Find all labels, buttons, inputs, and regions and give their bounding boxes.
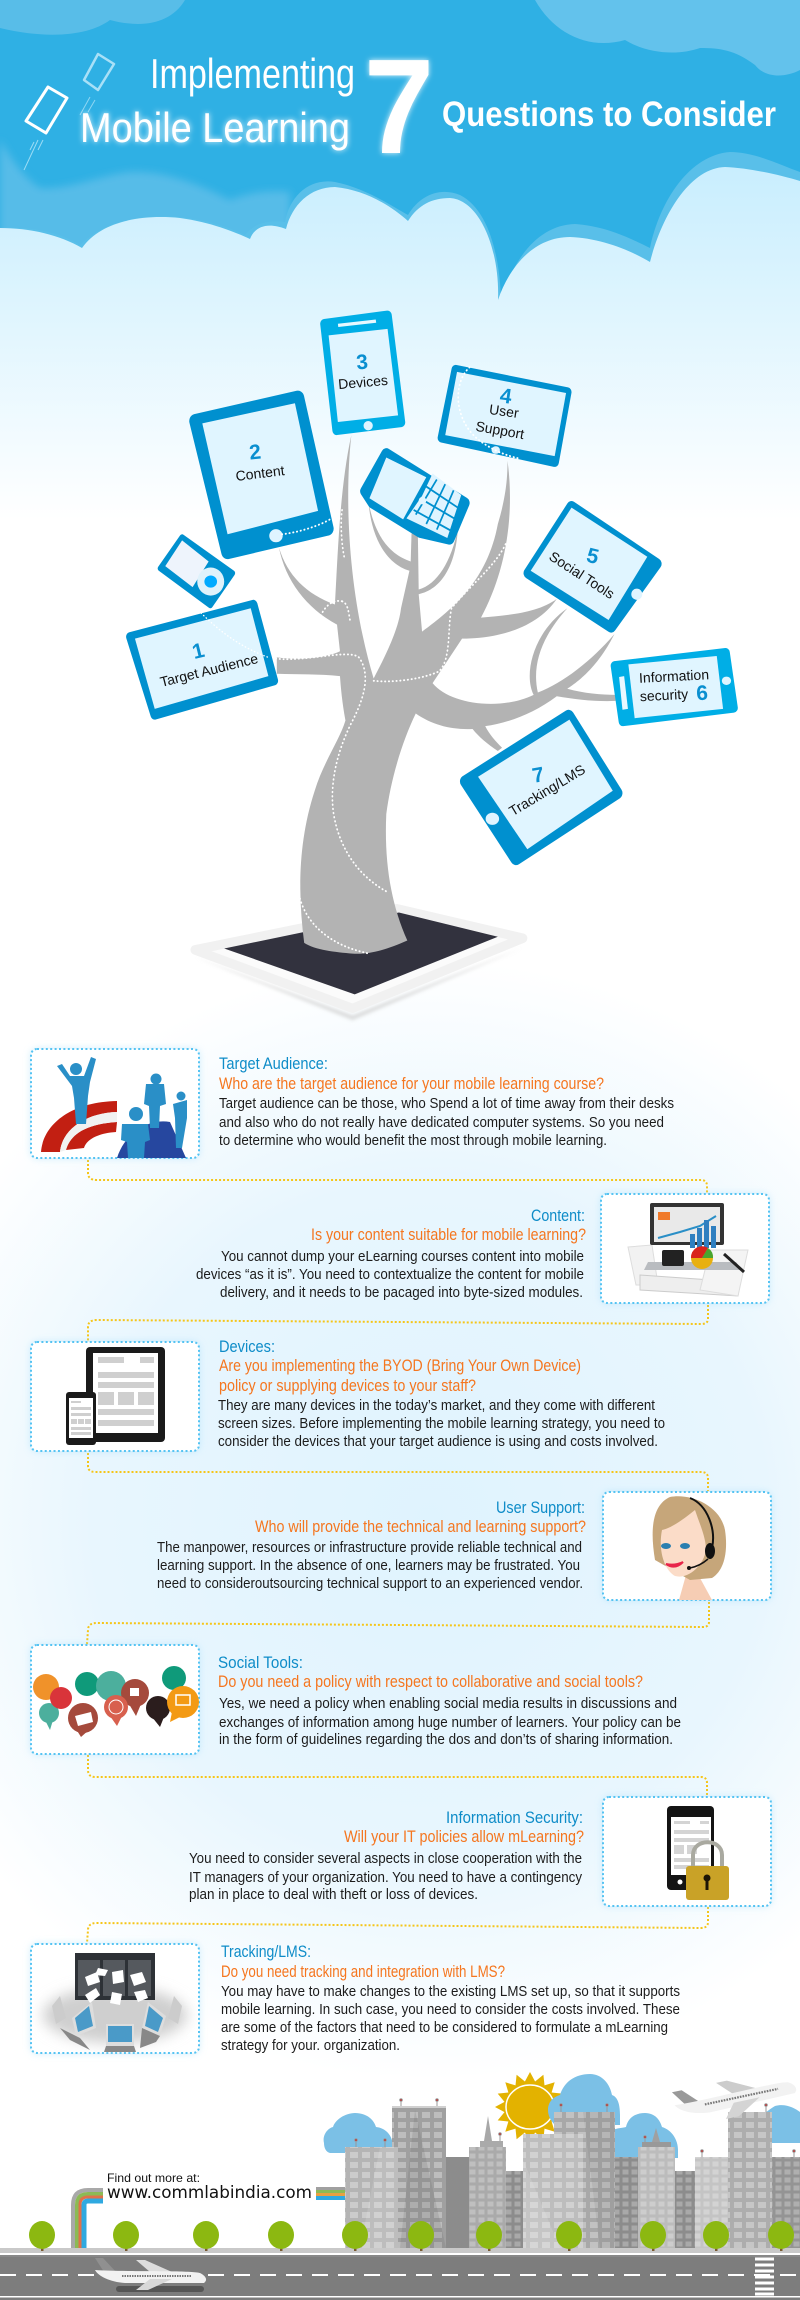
image panel: laptop and reports xyxy=(601,1194,769,1303)
image panel: social bubbles xyxy=(31,1645,199,1754)
image panel: people on target xyxy=(31,1049,199,1158)
runway road xyxy=(0,2255,800,2300)
airplane on runway xyxy=(95,2258,206,2292)
label: 7 Tracking/LMS: 7 xyxy=(531,763,546,788)
body text: Target audience can be those, who Spend a lot of time away from their desks xyxy=(219,1095,674,1112)
device 3: devices phone xyxy=(324,315,401,430)
section 1: target audience xyxy=(31,1049,674,1158)
image panel: phone and padlock xyxy=(603,1797,771,1906)
image panel: support agent xyxy=(603,1492,771,1600)
question: Will your IT policies allow mLearning? xyxy=(344,1828,584,1846)
connector 1 to 2 xyxy=(88,1160,707,1193)
text: find out more: Find out more at: xyxy=(107,2171,200,2185)
device 7: tracking tablet xyxy=(465,716,617,859)
question: Who will provide the technical and learning support? xyxy=(255,1518,586,1536)
label: 1 Target Audience: 1 xyxy=(190,639,207,664)
image panel: server and laptops xyxy=(31,1944,199,2053)
device 6: information security phone xyxy=(615,653,734,721)
illustration: tree of devices xyxy=(130,315,734,1020)
sun xyxy=(495,2072,565,2142)
body text xyxy=(218,1397,665,1450)
body text xyxy=(196,1248,584,1301)
body text: need to consideroutsourcing technical support to an experienced vendor. xyxy=(157,1575,583,1592)
label: 3 Devices xyxy=(337,351,389,392)
heading: Tracking/LMS: xyxy=(221,1942,311,1961)
buildings xyxy=(345,2099,800,2248)
device 1: target audience tablet xyxy=(130,604,274,715)
body text: You cannot dump your eLearning courses content into mobile xyxy=(221,1248,584,1265)
connector 3 to 4 xyxy=(88,1453,708,1491)
body text: learning support. In the absence of one, learners may be frustrated. You xyxy=(157,1557,580,1574)
heading: Social Tools: xyxy=(218,1653,303,1672)
body text xyxy=(157,1539,583,1592)
body text: IT managers of your organization. You need to have a contingency xyxy=(189,1869,582,1886)
body text: delivery, and it needs to be pacaged into byte-sized modules. xyxy=(220,1284,583,1301)
question: policy or supplying devices to your staff? xyxy=(219,1377,476,1395)
body text xyxy=(189,1850,582,1903)
label: 3 Devices: 3 xyxy=(355,351,369,374)
body text: to determine who would benefit the most through mobile learning. xyxy=(219,1132,607,1149)
body text: mobile learning. In such case, you need to consider the costs involved. These xyxy=(221,2001,680,2018)
connector 2 to 3 xyxy=(88,1305,708,1341)
body text: They are many devices in the today’s market, and they come with different xyxy=(218,1397,656,1414)
icon: flying phone large xyxy=(24,87,67,170)
icon: flying phone small xyxy=(80,54,114,115)
heading: Target Audience: xyxy=(219,1054,328,1073)
device: music player xyxy=(160,537,233,605)
image panel: tablet and phone xyxy=(31,1342,199,1451)
heading: Content: xyxy=(531,1206,585,1225)
body text: consider the devices that your target audience is using and costs involved. xyxy=(218,1433,658,1450)
body text xyxy=(219,1695,681,1748)
title: Mobile Learning: Mobile Learning xyxy=(80,104,350,151)
header sky and clouds xyxy=(0,0,800,520)
label: 1 Target Audience: Target Audience xyxy=(158,650,260,690)
body text xyxy=(221,1983,680,2054)
body text: You need to consider several aspects in close cooperation with the xyxy=(189,1850,582,1867)
heading: User Support: xyxy=(496,1498,585,1517)
label: 5 Social Tools: Social Tools xyxy=(546,548,618,602)
trees xyxy=(29,2221,794,2253)
flying airplane xyxy=(672,2067,799,2129)
body text: strategy for your. organization. xyxy=(221,2037,400,2054)
section 5: social tools xyxy=(31,1645,681,1754)
label: 4 User Support: 4 xyxy=(498,384,513,409)
link ribbon right xyxy=(316,2187,345,2200)
question: Do you need tracking and integration with LMS? xyxy=(221,1963,505,1981)
label: Information security 6: Information xyxy=(639,666,709,686)
connector 6 to 7 xyxy=(87,1907,708,1943)
section 7: tracking LMS xyxy=(31,1942,680,2054)
body text: devices “as it is”. You need to contextualize the content for mobile xyxy=(196,1266,584,1283)
label: 4 User Support: Support xyxy=(474,418,526,442)
label: Information security 6: security xyxy=(639,686,689,704)
soft blue body wash xyxy=(0,960,800,2080)
label: 3 Devices: Devices xyxy=(337,372,389,392)
device 2: content tablet xyxy=(196,398,332,552)
body text: The manpower, resources or infrastructure provide reliable technical and xyxy=(157,1539,582,1556)
label: 4 User Support: User xyxy=(488,401,520,421)
body text: exchanges of information among huge number of learners. Your policy can be xyxy=(219,1714,681,1731)
label: 5 Social Tools: 5 xyxy=(584,544,601,569)
link ribbon left xyxy=(73,2190,103,2248)
section 3: devices xyxy=(31,1337,665,1451)
body text: and also who do not really have dedicated computer systems. So you need xyxy=(219,1114,664,1131)
body text: plan in place to deal with theft or loss of devices. xyxy=(189,1886,478,1903)
sidewalk xyxy=(0,2248,800,2253)
title: Implementing: Implementing xyxy=(150,50,355,97)
body text: Yes, we need a policy when enabling social media results in discussions and xyxy=(219,1695,677,1712)
connector 5 to 6 xyxy=(88,1755,707,1796)
device: smartphone with keyboard xyxy=(365,454,465,539)
question: Are you implementing the BYOD (Bring Your Own Device) xyxy=(219,1357,581,1375)
clouds behind buildings xyxy=(324,2074,800,2158)
label: Information security 6 xyxy=(639,666,709,705)
section 4: user support xyxy=(157,1492,771,1600)
section 6: information security xyxy=(189,1797,771,1906)
tablet base xyxy=(195,909,523,1020)
question: Do you need a policy with respect to collaborative and social tools? xyxy=(218,1673,643,1691)
device 4: user support tablet xyxy=(442,367,567,462)
body text xyxy=(219,1095,674,1149)
heading: Information Security: xyxy=(446,1808,583,1827)
connector 4 to 5 xyxy=(87,1602,709,1644)
label: 4 User Support xyxy=(474,384,526,442)
label: 2 Content: 2 xyxy=(248,440,262,465)
label: 2 Content xyxy=(235,440,285,484)
question xyxy=(219,1357,581,1395)
label: 7 Tracking/LMS: Tracking/LMS xyxy=(506,761,588,819)
label: 2 Content: Content xyxy=(235,462,285,484)
question: Who are the target audience for your mobile learning course? xyxy=(219,1075,604,1093)
label: Information security 6: 6 xyxy=(696,682,709,705)
text: website url: www.commlabindia.com xyxy=(107,2183,312,2202)
body text: screen sizes. Before implementing the mobile learning strategy, you need to xyxy=(218,1415,665,1432)
body text: are some of the factors that need to be considered to formulate a mLearning xyxy=(221,2019,668,2036)
section 2: content xyxy=(196,1194,769,1303)
title: big number 7: 7 xyxy=(364,31,434,182)
heading: Devices: xyxy=(219,1337,275,1356)
body text: in the form of guidelines regarding the dos and don’ts of sharing information. xyxy=(219,1731,673,1748)
question: Is your content suitable for mobile learning? xyxy=(311,1226,586,1244)
device 5: social tools tablet xyxy=(529,507,657,627)
body text: You may have to make changes to the existing LMS set up, so that it supports xyxy=(221,1983,680,2000)
tree trunk and branches xyxy=(268,435,616,954)
footer city scene xyxy=(0,2067,800,2300)
